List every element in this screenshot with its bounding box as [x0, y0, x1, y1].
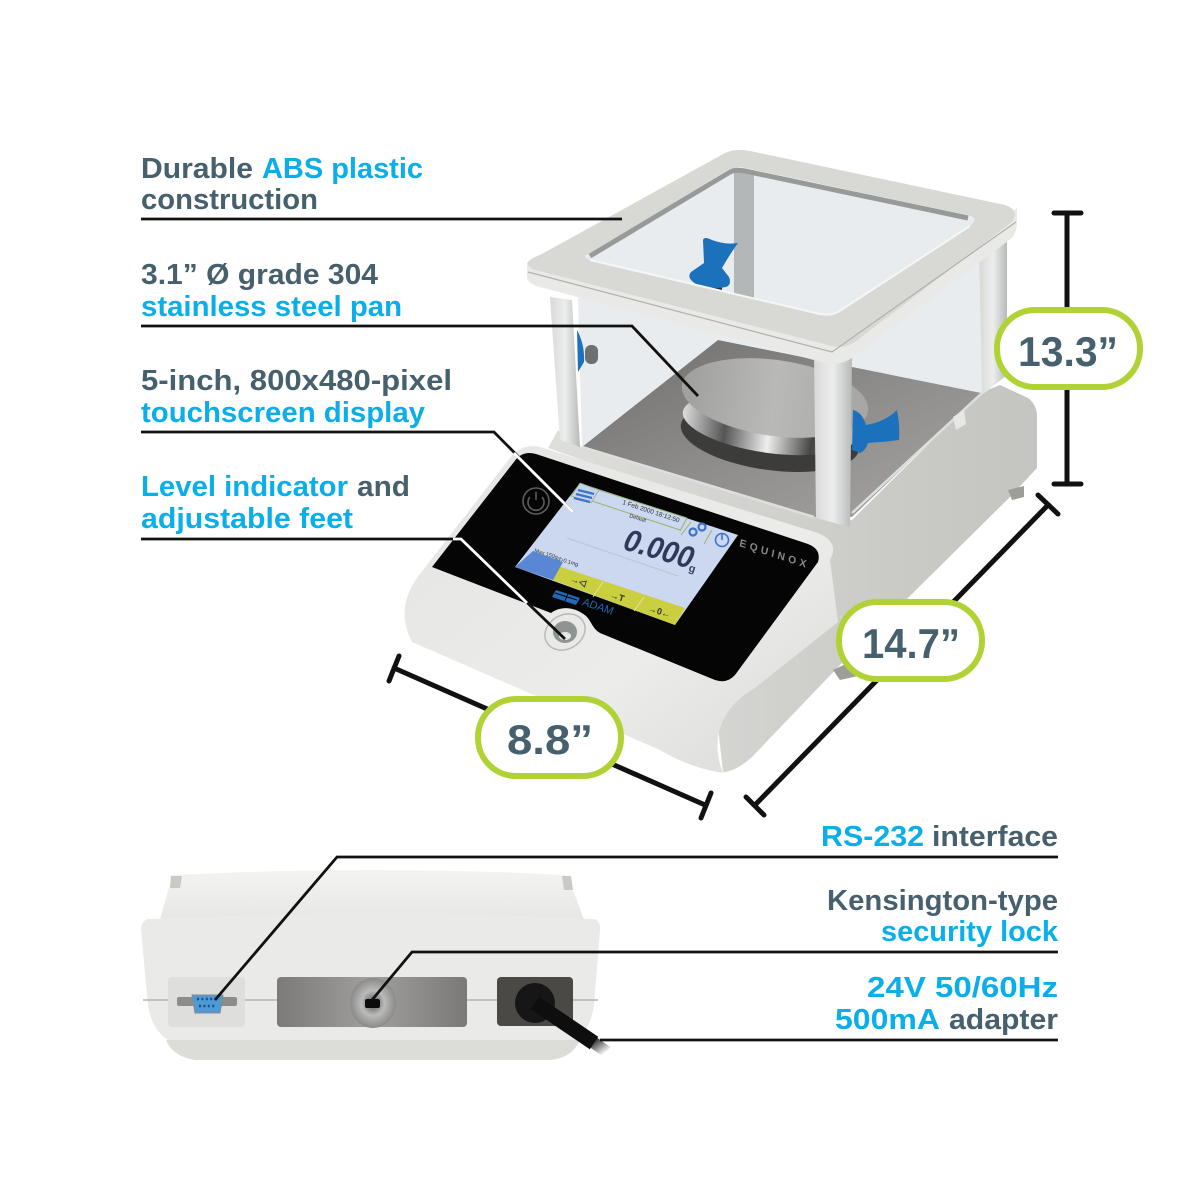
right rear pillar — [979, 225, 1007, 395]
dimension: height 13.3: 13.3” — [1018, 328, 1118, 375]
black control panel — [432, 453, 819, 681]
rear base body — [548, 385, 1037, 772]
label: ABS plastic — [141, 153, 423, 216]
power button icon — [523, 488, 549, 514]
dimension: height 13.3 — [997, 213, 1140, 484]
label: ABS plastic: ABS plastic — [262, 153, 423, 185]
label: RS-232 — [821, 821, 1058, 853]
rear lower lip — [166, 1040, 580, 1060]
label: touchscreen: touchscreen display — [141, 397, 425, 429]
balance product illustration — [405, 150, 1037, 773]
side door catch — [953, 410, 966, 430]
leader line: pan — [141, 326, 698, 396]
screen date text: 1 Feb 2000 18:12:50 — [621, 499, 681, 525]
label: level and feet: Level indicator — [141, 471, 348, 503]
readability label: d=0.1mg — [556, 556, 579, 568]
leader overlay on panel: level — [453, 539, 527, 603]
touchscreen — [515, 483, 738, 625]
label: adapter: 24V 50/60Hz — [867, 972, 1058, 1004]
dimension: depth 14.7 — [746, 495, 1058, 815]
frame inner rim — [590, 170, 968, 256]
top frame side lip — [527, 208, 1017, 364]
glass edge — [582, 393, 982, 517]
rear top shell — [160, 870, 584, 920]
label: adapter: 500mA — [835, 1004, 940, 1036]
ADAM logo — [552, 590, 615, 618]
function icons: →◁ — [569, 574, 588, 589]
weight reading: 0.000 — [620, 522, 698, 576]
label: adapter: adapter — [949, 1004, 1058, 1036]
label: touchscreen: 5-inch, 800x480-pixel — [141, 365, 452, 397]
unit g: g — [687, 562, 697, 576]
Kensington lock plate — [277, 977, 467, 1028]
label: stainless pan: stainless steel pan — [141, 291, 402, 323]
label: RS-232: interface — [932, 821, 1058, 853]
leader line: lock — [372, 952, 1058, 1000]
power port — [497, 977, 573, 1026]
label: stainless pan: 3.1” Ø grade 304 — [141, 259, 378, 291]
label: ABS plastic: Durable — [141, 153, 253, 185]
blue mode tab — [515, 551, 563, 580]
screen profile text: Default — [628, 513, 647, 524]
right blue door knob — [852, 410, 899, 453]
leader line: display — [141, 432, 573, 512]
label: level and feet — [141, 471, 410, 535]
RS-232 port — [168, 977, 245, 1027]
dimension: width 8.8: 8.8” — [507, 716, 593, 763]
label: security lock: Kensington-type — [827, 885, 1058, 917]
yellow function bar — [553, 565, 685, 625]
leader line: adapter — [600, 1039, 1058, 1041]
dimension: depth 14.7: 14.7” — [862, 620, 960, 667]
shell tabs — [170, 876, 573, 890]
rear window pillar — [734, 170, 754, 302]
front control module — [405, 446, 838, 773]
back blue door knob — [689, 238, 738, 293]
capacity label: Max 150g — [533, 548, 558, 561]
label: ABS plastic: construction — [141, 184, 318, 216]
weighing pan — [676, 347, 873, 482]
EQUINOX wordmark: EQUINOX — [738, 538, 807, 571]
top frame — [528, 150, 1015, 347]
leader line: level — [141, 539, 565, 639]
frame seam — [528, 222, 1016, 352]
label: adapter — [835, 972, 1058, 1036]
housing seam — [143, 999, 598, 1001]
front corner pillar — [814, 355, 852, 527]
label: stainless pan — [141, 259, 402, 323]
function icons: →T — [609, 590, 626, 604]
label: security lock: security lock — [881, 916, 1059, 948]
dimension: width 8.8 — [389, 656, 711, 818]
feet — [833, 486, 1024, 680]
function icons: →0← — [647, 603, 672, 620]
left door knob — [577, 330, 598, 372]
leader line: frame — [141, 218, 622, 220]
rear main housing — [141, 913, 600, 1040]
left front pillar — [550, 297, 580, 447]
label: security lock — [827, 885, 1059, 948]
label: level and feet: and — [357, 471, 410, 503]
screen header lines — [592, 490, 687, 531]
label: RS-232: RS-232 — [821, 821, 924, 853]
screen menu button — [571, 483, 599, 503]
label: level and feet: adjustable feet — [141, 503, 353, 535]
settings gears icon — [690, 524, 706, 536]
chamber steel floor — [582, 340, 981, 517]
rear view illustration — [141, 870, 607, 1060]
ADAM logo: ADAM — [580, 596, 615, 618]
label: touchscreen — [141, 365, 452, 429]
level indicator bubble — [538, 607, 592, 657]
draft shield glass — [578, 168, 1007, 447]
screen power icon — [716, 534, 728, 546]
power cable — [535, 1003, 594, 1043]
leader overlay on panel: display — [514, 453, 573, 512]
function icons — [569, 574, 672, 620]
leader line: RS-232 — [215, 857, 1058, 1000]
